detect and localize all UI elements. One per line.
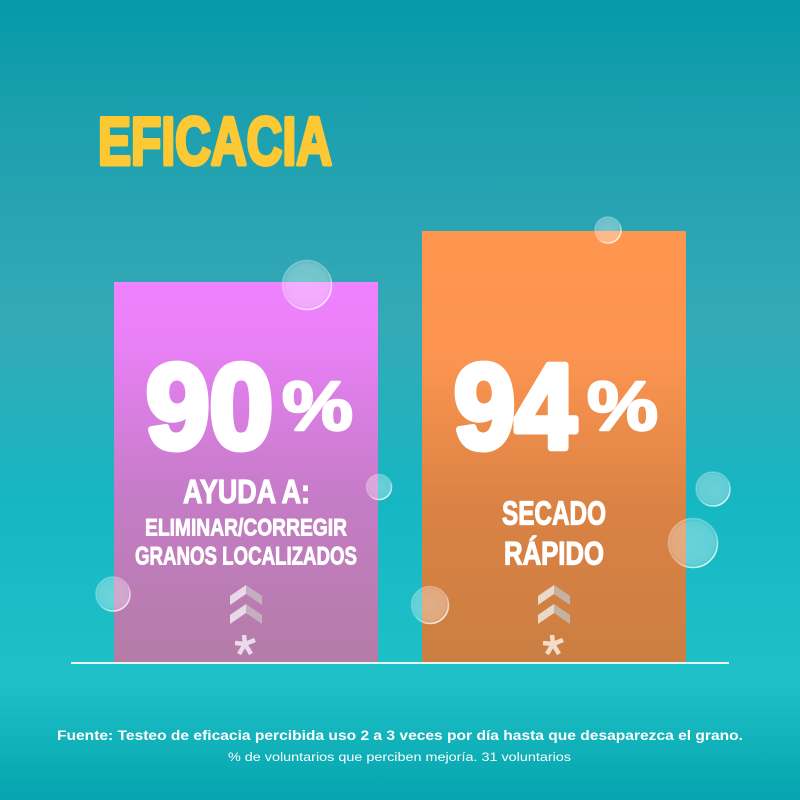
label: secado rapido: RÁPIDO [504, 536, 604, 572]
stat: 90 percent: 90 [146, 340, 273, 474]
label: eliminar granos: ELIMINAR/CORREGIR [145, 514, 347, 542]
stat: 94 percent: 94 [454, 340, 576, 474]
baseline [71, 662, 729, 664]
label: secado rapido: SECADO [502, 494, 606, 532]
sample note: % de voluntarios que perciben mejoría. 31 voluntarios [228, 750, 571, 764]
source note: Fuente: Testeo de eficacia percibida uso 2 a 3 veces por día hasta que desaparezca el grano. [57, 728, 743, 743]
title: EFICACIA [98, 104, 332, 180]
bubbles [96, 217, 730, 624]
stat: 94 percent [454, 340, 658, 474]
icon: double chevron up [230, 585, 262, 624]
icon: double chevron up [538, 585, 570, 624]
panel: 90% bar [114, 282, 378, 662]
stat: 90 percent [146, 340, 353, 474]
stat: 90 percent: % [282, 367, 353, 445]
icon: asterisk [543, 635, 563, 654]
label: eliminar granos: GRANOS LOCALIZADOS [135, 542, 357, 570]
label: eliminar granos [135, 514, 357, 570]
icon: asterisk [235, 635, 255, 654]
source note [57, 728, 743, 764]
panel: 94% bar [422, 231, 686, 662]
stat: 94 percent: % [587, 367, 658, 445]
label: ayuda a: AYUDA A: [183, 473, 310, 510]
label: secado rapido [502, 494, 606, 572]
